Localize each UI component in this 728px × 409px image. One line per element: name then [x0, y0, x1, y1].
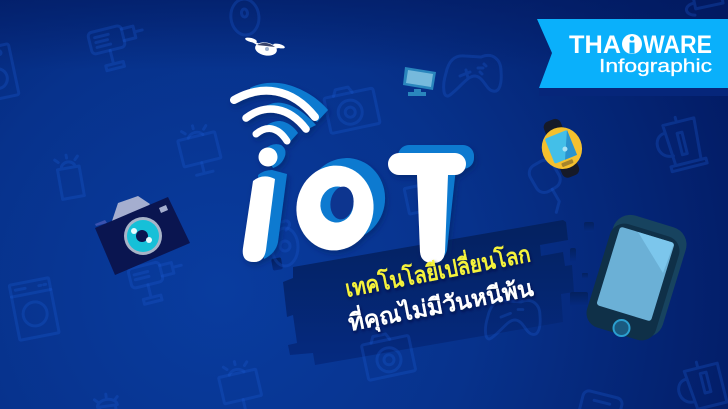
icon: tv bottom: [216, 357, 264, 409]
T blue depth: [398, 145, 474, 262]
icon: drill below camera: [128, 256, 188, 306]
i blue depth: [258, 144, 287, 259]
logo wordmark: THA: [569, 31, 621, 59]
heading line 2: ที่คุณไม่มีวันหนีพ้น: [345, 271, 536, 338]
icon: smartwatch: [532, 113, 592, 183]
icon: washer bottom left: [9, 278, 59, 340]
icon: camera behind logo: [323, 82, 380, 134]
letter i: [243, 144, 287, 262]
camera lens: [124, 217, 162, 255]
banner backdrop: [271, 220, 594, 365]
O blue depth: [300, 152, 392, 246]
icon: kettle bottom right: [673, 357, 727, 409]
O white face: [291, 161, 379, 255]
camera button: [95, 220, 107, 226]
icon: gamepad top: [444, 55, 501, 96]
wifi white arcs: [234, 91, 315, 141]
icon: tv behind T: [404, 181, 448, 222]
icon: ornament behind i: [272, 221, 298, 266]
heading: thai lines: [342, 237, 536, 338]
logo i badge: [622, 34, 642, 54]
icon: kettle right: [652, 113, 707, 174]
icon: device bottom: [577, 390, 623, 409]
ribbon shape: [537, 19, 728, 88]
wifi blue depth: [250, 83, 328, 144]
phone home button: [614, 320, 630, 336]
O hole: [318, 184, 356, 225]
letter O: [291, 152, 392, 255]
icon: monitor: [403, 67, 436, 96]
ribbon: logo: [537, 19, 728, 96]
icon: lamp bottom: [94, 393, 119, 409]
icon: lamp left: [54, 153, 84, 200]
icon: camera: [95, 196, 190, 275]
logo subtitle: Infographic: [599, 56, 712, 76]
icon: drill top left: [87, 20, 150, 73]
heading line 1: เทคโนโลยีเปลี่ยนโลก: [342, 237, 532, 302]
icon: mouse behind watch: [526, 157, 575, 215]
camera flash: [159, 205, 168, 213]
icon: smartphone: [583, 210, 691, 344]
ribbon shadow: [539, 88, 728, 96]
phone back: [585, 210, 691, 342]
icon: lamp right of ribbon: [684, 0, 724, 17]
phone screen: [596, 226, 675, 322]
wifi symbol: [234, 83, 328, 144]
icon: mouse top: [229, 0, 261, 36]
logo wordmark end: WARE: [643, 31, 712, 59]
phone front: [583, 220, 683, 344]
icon: gamepad lower: [485, 300, 540, 339]
phone glare: [638, 232, 673, 273]
icon: camera bottom: [360, 329, 416, 380]
T white face: [388, 153, 466, 263]
letter T: [388, 145, 474, 263]
camera top: [112, 196, 150, 221]
icon: tv middle left: [175, 121, 224, 178]
camera body: [95, 197, 190, 275]
icon: drone: [245, 37, 285, 57]
i white dot and stem: [243, 148, 278, 262]
icon: speaker left edge: [0, 44, 19, 102]
